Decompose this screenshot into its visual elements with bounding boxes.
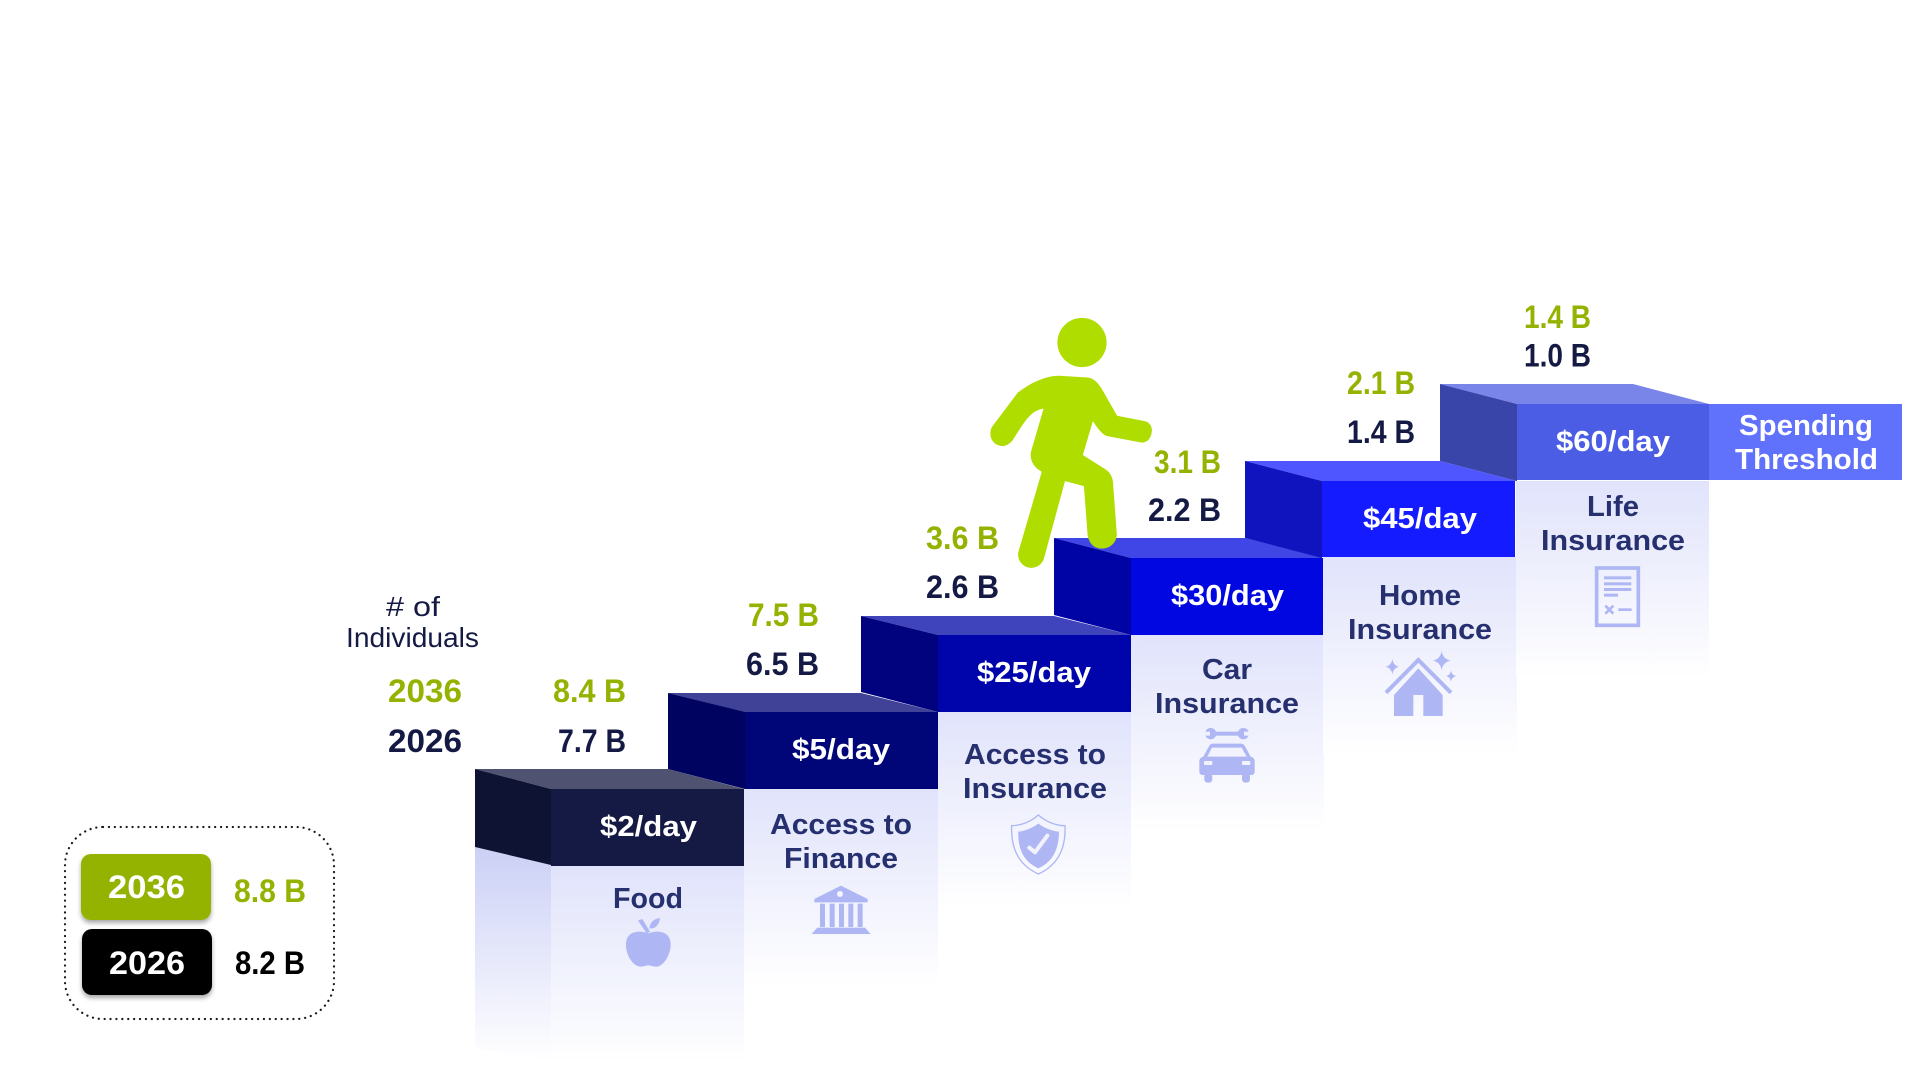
step 6 fading column	[1516, 481, 1709, 678]
step 1 values: 8.4 B	[553, 673, 626, 709]
step 3 values: 3.6 B	[926, 520, 999, 556]
step 4 block	[1054, 538, 1324, 635]
step 2 label: Access to	[770, 809, 912, 841]
step 5 price: $45/day	[1363, 503, 1477, 535]
step 1 fading column	[475, 847, 744, 1062]
step 1 price: $2/day	[600, 811, 697, 843]
step 2 values	[746, 597, 819, 682]
step 6 label: Insurance	[1541, 525, 1685, 557]
step 2 fading column	[744, 789, 938, 986]
icon: house	[1386, 651, 1456, 716]
step 4 values: 3.1 B	[1154, 444, 1221, 480]
legend value 2026: 8.2 B	[235, 945, 305, 981]
step 1 values	[553, 673, 626, 759]
step 5 label: Insurance	[1348, 614, 1492, 646]
step 5 values	[1347, 365, 1415, 450]
legend swatch 2036: 2036	[108, 869, 185, 905]
spending threshold box	[1709, 404, 1902, 480]
spending threshold box: Threshold	[1735, 444, 1878, 476]
icon: document	[1597, 568, 1638, 625]
step 6 values: 1.4 B	[1524, 299, 1591, 335]
step 1 values: 7.7 B	[558, 723, 626, 759]
step 1 block	[475, 769, 744, 866]
icon: car and wrench	[1199, 728, 1255, 783]
icon: apple	[626, 918, 671, 967]
step 6 label: Life	[1587, 491, 1639, 523]
step 2 price: $5/day	[792, 734, 890, 766]
step 4 values	[1148, 444, 1221, 528]
step 4 price: $30/day	[1171, 580, 1284, 612]
step 5 fading column	[1323, 557, 1517, 754]
step 3 label: Access to	[964, 739, 1106, 771]
step 5 values: 2.1 B	[1347, 365, 1415, 401]
step 2 values: 7.5 B	[748, 597, 819, 633]
step 4 fading column	[1131, 634, 1324, 831]
step 3 label	[963, 739, 1107, 805]
spending threshold box: Spending	[1739, 410, 1873, 442]
step 4 label	[1155, 654, 1299, 720]
step 6 label	[1541, 491, 1685, 557]
legend swatch 2026: 2026	[109, 945, 185, 981]
icon: bank	[812, 886, 871, 934]
legend swatch 2026	[82, 929, 212, 995]
step 6 block	[1440, 384, 1709, 481]
step 5 label	[1348, 580, 1492, 646]
year label 2036: 2036	[388, 673, 462, 709]
step 4 values: 2.2 B	[1148, 492, 1221, 528]
step 5 label: Home	[1379, 580, 1461, 612]
legend value 2036: 8.8 B	[234, 873, 306, 909]
step 6: life insurance	[1440, 299, 1709, 678]
step 2 label	[770, 809, 912, 875]
step 2 values: 6.5 B	[746, 646, 819, 682]
legend swatch 2036	[81, 854, 211, 920]
legend	[65, 827, 334, 1019]
step 3: access to insurance	[861, 520, 1131, 908]
step 6 values	[1524, 299, 1591, 374]
step 4 label: Car	[1202, 654, 1252, 686]
step 1 label: Food	[613, 883, 683, 915]
year label 2026: 2026	[388, 723, 462, 759]
legend dotted frame	[65, 827, 334, 1019]
step 4 label: Insurance	[1155, 688, 1299, 720]
step 5 values: 1.4 B	[1347, 414, 1415, 450]
axis label: number of individuals: Individuals	[346, 622, 479, 653]
step 3 label: Insurance	[963, 773, 1107, 805]
step 3 block	[861, 616, 1131, 712]
step 6 price: $60/day	[1556, 426, 1670, 458]
axis label: number of individuals: # of	[386, 591, 440, 622]
icon: walking person	[990, 318, 1152, 568]
step 3 fading column	[938, 711, 1131, 908]
step 3 price: $25/day	[977, 657, 1091, 689]
step 5: home insurance	[1245, 365, 1517, 754]
step 2 label: Finance	[784, 843, 898, 875]
step 3 values: 2.6 B	[926, 569, 999, 605]
step 5 block	[1245, 461, 1517, 558]
axis label: number of individuals	[346, 591, 479, 653]
step 2: access to finance	[668, 597, 938, 986]
icon: shield	[1012, 815, 1065, 874]
step 2 block	[668, 693, 938, 789]
step 1: food	[475, 673, 744, 1062]
step 3 values	[926, 520, 999, 605]
step 6 values: 1.0 B	[1524, 338, 1591, 374]
step 4: car insurance	[1054, 444, 1324, 831]
